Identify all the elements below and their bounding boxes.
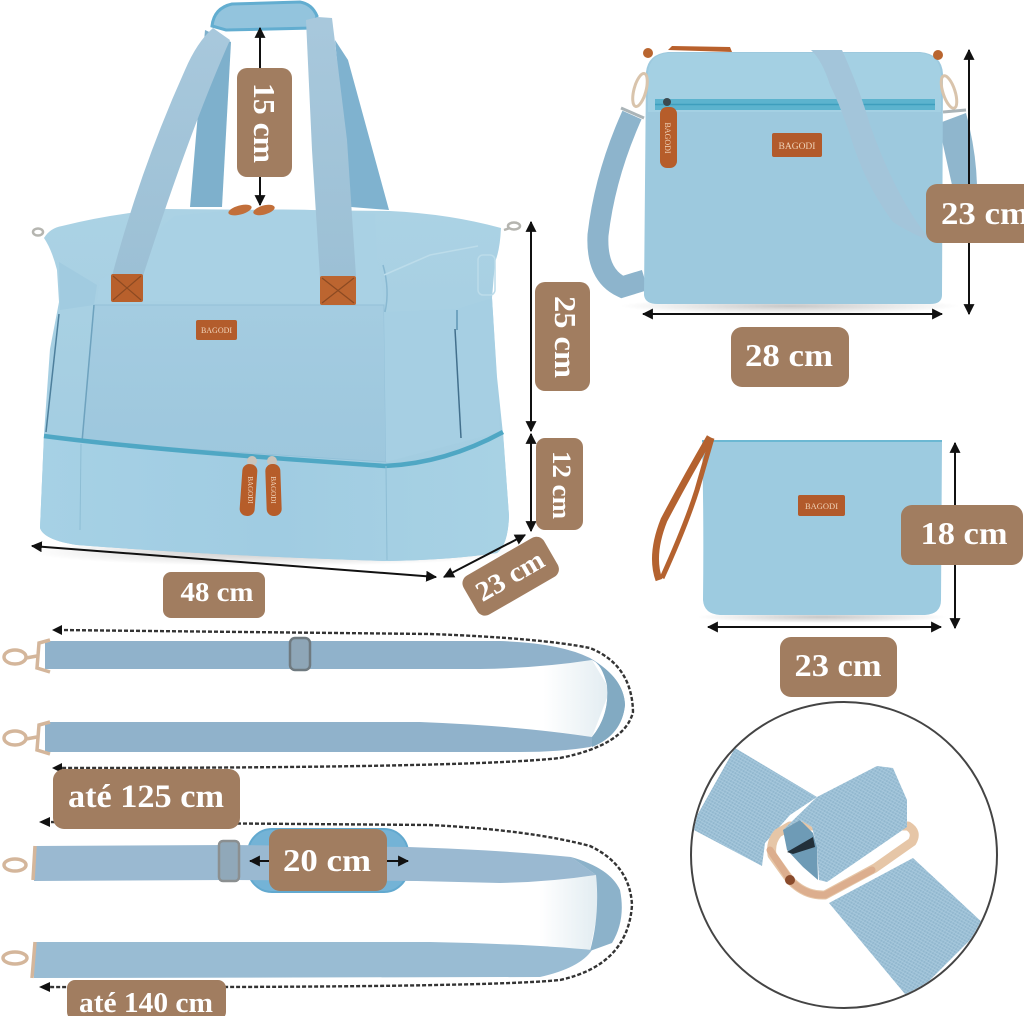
pouch logo patch [798,495,845,516]
label 15 cm [237,68,292,177]
side rings [33,222,520,236]
strap 125 dashed outline [58,630,633,768]
strap 140 back fold [571,857,622,951]
label até 125 cm [53,769,240,829]
arrow 48 cm [32,546,436,577]
buckle pin [785,875,795,885]
label pouch 23 cm [780,637,897,697]
crossbody zipper pull: BAGODI [663,122,672,154]
right side pocket [384,298,500,462]
strap 140 buckle [219,841,239,881]
pouch logo patch: BAGODI [805,501,838,511]
fold of webbing [783,766,907,882]
circle outline [691,702,997,1008]
label até 125 cm: até 125 cm [68,779,224,815]
label 20 cm: 20 cm [283,842,371,878]
crossbody logo patch: BAGODI [779,142,815,152]
bottom zipper pulls: BAGODI [246,476,254,504]
strap 140 band [34,845,596,883]
crossbody rings [621,72,966,118]
label 28 cm [731,327,849,387]
left side panel [59,262,97,310]
pouch shadow [697,611,947,623]
arrow crossbody width [643,313,942,315]
strap 125 hook top [4,640,50,672]
strap 125 hook bottom [4,722,50,754]
strap 140 hook bottom [3,942,35,978]
strap 140 dashed outline [45,822,632,987]
strap 140 cm [3,817,632,992]
front pocket [82,305,386,462]
strap 125 arrowheads [52,625,62,773]
logo patch [196,320,237,340]
arrow crossbody height [968,50,970,314]
bottom zipper pulls: BAGODI [269,476,277,504]
strap 140 lower band [34,942,592,978]
diagonal strap [811,50,927,240]
label 12 cm: 12 cm [547,451,576,519]
left shoulder strap [598,115,645,287]
crossbody shadow [620,298,960,314]
label 12 cm [536,438,583,530]
pouch body [702,440,942,615]
arrow depth 23 cm [444,535,525,577]
front handle strap right [306,17,356,278]
label crossbody height 23 cm [926,184,1024,243]
label 15 cm: 15 cm [247,83,282,163]
front handle strap left [112,28,230,276]
side pocket seams [46,246,495,442]
handle grip [212,2,317,30]
label 20 cm [269,829,387,891]
strap 125 buckle [290,638,310,670]
lower right webbing [829,858,985,1000]
crossbody body [644,52,943,304]
bottom zipper pulls [239,456,282,516]
label 48 cm [163,572,265,618]
strap 125 band [45,641,625,752]
shadow under duffel [30,538,520,566]
arrow 25 cm [530,222,532,431]
upper left webbing [690,748,817,866]
hole in fold [783,820,818,880]
bottom compartment [40,432,509,561]
label depth 23 cm: 23 cm [470,545,550,608]
label depth 23 cm [459,533,562,619]
right shoulder strap [942,113,977,185]
hole shadow [787,837,815,854]
label 18 cm [901,505,1023,565]
label 25 cm [535,282,590,391]
leather tab right [320,276,356,305]
bottom seams [80,444,387,560]
label 28 cm: 28 cm [745,337,833,373]
arrow 15 cm [259,28,261,205]
wrist strap return [662,438,712,578]
strap 125 cm [4,625,633,773]
crossbody logo patch [772,133,822,157]
back handle straps [190,30,389,210]
label crossbody height 23 cm: 23 cm [941,195,1024,231]
strap 140 hook top [4,846,35,880]
label pouch 23 cm: 23 cm [794,647,882,683]
label 25 cm: 25 cm [548,296,583,378]
arrow pouch height [954,443,956,628]
strap 140 shoulder pad [248,829,408,892]
strap 140 fold [430,875,598,950]
duffel body [40,209,509,561]
label 18 cm: 18 cm [920,515,1008,551]
crossbody end caps [643,48,943,60]
pouch top zipper [702,440,942,442]
bottom zipper [44,432,503,466]
upper compartment [97,209,384,305]
label 48 cm: 48 cm [180,577,254,607]
wrist strap [655,437,710,580]
20 cm arrows [250,860,408,862]
crossbody zipper [655,99,935,110]
strap 125 fold [420,660,610,737]
crossbody top zip tab [668,46,732,52]
logo patch: BAGODI [201,326,232,335]
strap 140 arrowheads [39,817,50,992]
upper panel [648,53,941,112]
pouch [655,437,947,623]
detail circle: buckle [690,702,997,1008]
strap 125 back fold [592,660,625,747]
buckle frame [772,826,914,895]
top zipper pulls [227,203,276,217]
leather tab left [111,274,143,302]
main duffel bag [30,2,520,566]
arrow 12 cm [530,434,532,531]
detail strap [690,748,985,1000]
arrow pouch width [708,626,941,628]
label até 140 cm [67,980,226,1016]
crossbody bag [598,46,977,314]
buckle front bar [770,850,872,895]
crossbody zipper pull [660,98,677,168]
